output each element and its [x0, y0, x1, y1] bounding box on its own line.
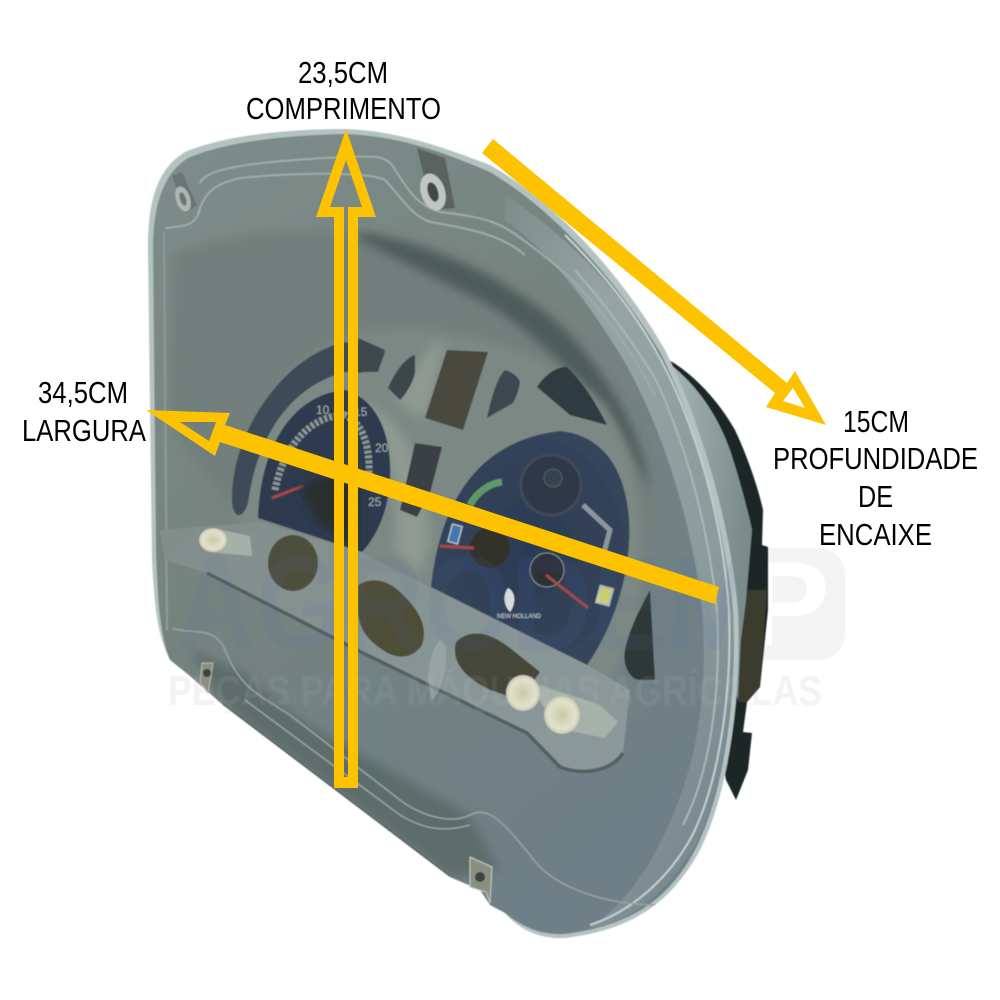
right dial: yellow gauge marker	[596, 586, 613, 606]
product photo: instrument cluster	[148, 129, 835, 938]
left dial: outer dark arc	[232, 342, 385, 515]
label: profundidade de encaixe	[773, 404, 978, 552]
glass highlight	[428, 640, 446, 700]
lower edge: dark seam	[223, 705, 450, 877]
label: comprimento: 23,5CM	[298, 55, 388, 90]
label: profundidade de encaixe: ENCAIXE	[819, 517, 932, 552]
watermark: light logo and tagline behind the product: P	[745, 537, 830, 671]
right dial: blue gauge marker	[448, 524, 462, 544]
lens: outer transparent rim	[148, 129, 739, 938]
nut: top left	[172, 172, 197, 214]
bezel: light ribs between the windows	[372, 344, 442, 570]
bezel: grey panel around the dials	[240, 334, 638, 676]
label: largura	[22, 375, 146, 448]
right dial: brand name: NEW HOLLAND	[497, 614, 542, 620]
right dial: white scale	[583, 505, 610, 560]
left dial: numbers: 20	[375, 441, 389, 455]
arrow: comprimento (vertical)	[316, 129, 376, 788]
right flange: lighter band	[505, 195, 733, 928]
left dial: navy face	[258, 390, 390, 552]
watermark: light logo and tagline behind the product	[168, 537, 845, 714]
arrow: largura (horizontal)	[146, 410, 719, 604]
watermark: light logo and tagline behind the product: PEÇAS PARA MÁQUINAS AGRÍCOLAS	[168, 667, 822, 714]
recess: dark upper shadow	[360, 232, 650, 490]
lens: face with clipped interior details	[152, 134, 735, 935]
band: dark lower edge	[207, 573, 623, 771]
left dial: numbers: 10	[316, 403, 330, 417]
clip: bottom centre	[470, 857, 492, 903]
label: profundidade de encaixe: 15CM	[843, 404, 909, 439]
watermark over product	[195, 556, 735, 712]
right dial: needle hubs	[470, 528, 510, 568]
label: largura: 34,5CM	[38, 375, 128, 410]
top flange: raised seal lines	[164, 157, 655, 630]
lower area: shaded lens strip	[190, 650, 500, 877]
rear housing: black casing on the right side	[652, 352, 768, 800]
band: lower switch panel	[160, 522, 630, 771]
right dial: round indicator	[521, 455, 581, 515]
label: comprimento	[246, 55, 441, 126]
left dial: needle hub	[300, 474, 360, 545]
face panel	[153, 134, 734, 934]
left dial: numbers: 15	[354, 405, 368, 419]
right dial: red needles	[440, 546, 588, 608]
label: largura: LARGURA	[22, 413, 146, 448]
label: profundidade de encaixe: DE	[858, 479, 893, 514]
right flange: highlight lines	[565, 235, 729, 925]
right dial: navy face	[431, 431, 629, 665]
rear housing: olive lower section	[738, 590, 767, 702]
left dial: red needle	[272, 486, 303, 498]
left dial: numbers: 25	[368, 495, 382, 509]
left dial: scale arc	[275, 415, 369, 490]
arrow: profundidade (diagonal)	[482, 139, 826, 425]
rear housing: grey side wall	[640, 345, 752, 700]
switch windows	[268, 535, 655, 700]
label: comprimento: COMPRIMENTO	[246, 91, 441, 126]
right dial: brand logo	[504, 588, 514, 612]
bulbs: clear light bulbs	[199, 528, 618, 738]
watermark over product: PEÇAS PARA MÁQUINAS AGRÍCOLAS	[168, 667, 822, 714]
right dial: green scale	[470, 482, 502, 505]
clip: bottom left	[200, 663, 213, 693]
left dial: numbers	[316, 403, 389, 509]
watermark over product: AGRODEMP	[175, 528, 835, 679]
bottom seal lines	[172, 628, 660, 905]
recess: shaded area above the dials	[175, 235, 366, 386]
nut: top centre	[416, 148, 455, 214]
windows: warning lamp cut-outs	[358, 338, 607, 517]
